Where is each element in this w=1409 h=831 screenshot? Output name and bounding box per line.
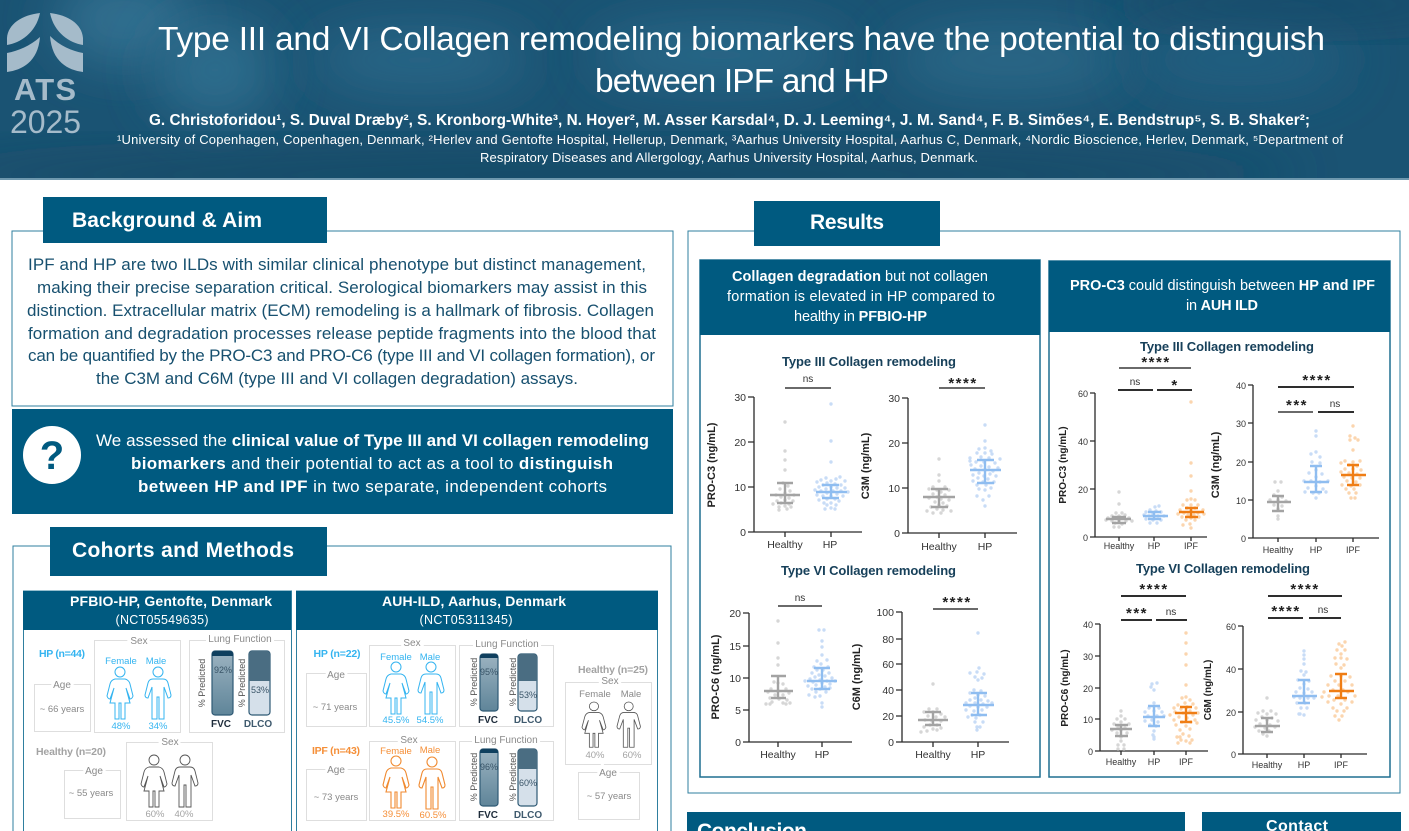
chart: C3M AUH: 10 xyxy=(1236,496,1246,506)
sex box: AUH HP: 45.5% xyxy=(383,715,410,726)
subheading: type VI: Type VI Collagen remodeling xyxy=(781,563,956,578)
chart: C6M PFBIO: C6M (ng/mL) xyxy=(851,643,863,710)
subheading: type III: Type III Collagen remodeling xyxy=(1140,339,1314,354)
heading: background and aim xyxy=(43,197,327,243)
chart: C3M AUH: IPF xyxy=(1346,545,1360,555)
chart: PRO-C3 PFBIO xyxy=(706,374,862,551)
subheading: type III: Type III Collagen remodeling xyxy=(782,354,956,369)
chart: PRO-C6 PFBIO: 10 xyxy=(729,673,741,685)
chart: C6M AUH: Healthy xyxy=(1252,760,1283,770)
sex box: HP: 34% xyxy=(148,721,168,732)
sex box: HP: Sex xyxy=(130,636,148,647)
chart: PRO-C3 PFBIO: HP xyxy=(823,539,837,551)
sex box: healthy: 60% xyxy=(145,809,165,820)
sex box: AUH healthy: Sex xyxy=(601,676,619,687)
sex box: healthy: Sex xyxy=(161,737,179,748)
chart: PRO-C3 PFBIO: 10 xyxy=(734,482,746,494)
sex box: AUH healthy: Female xyxy=(579,689,611,700)
chart: C3M PFBIO: C3M (ng/mL) xyxy=(860,432,872,499)
chart: PRO-C6 PFBIO: HP xyxy=(815,749,829,761)
chart: PRO-C6 AUH: ns xyxy=(1166,607,1176,618)
panel: PFBIO-HP results xyxy=(700,260,1040,777)
lung function box: HP xyxy=(190,634,284,732)
chart: PRO-C6 PFBIO: Healthy xyxy=(760,749,797,761)
lung function box: AUH IPF: 60% xyxy=(519,778,537,788)
affiliations: Respiratory Diseases and Allergology, Aarhus University Hospital, Aarhus, Denmark. xyxy=(480,150,978,165)
age box: AUH HP xyxy=(306,670,366,726)
chart: C3M AUH: **** xyxy=(1302,372,1332,389)
sex box: AUH IPF: Female xyxy=(380,746,412,757)
lung function box: HP: FVC xyxy=(211,719,231,730)
header banner xyxy=(0,0,1409,197)
lung function box: AUH HP xyxy=(460,639,554,726)
sex box: AUH IPF: 60.5% xyxy=(420,810,447,821)
heading: results: Results xyxy=(810,211,884,234)
label: Healthy n=25: Healthy (n=25) xyxy=(578,664,648,676)
chart: PRO-C6 AUH: 20 xyxy=(1083,684,1093,694)
chart: C6M PFBIO: Healthy xyxy=(915,749,952,761)
chart: PRO-C6 PFBIO: 15 xyxy=(729,641,741,653)
text: background paragraph: formation and degradation processes release peptide fragments into the blood that xyxy=(28,324,656,343)
age box: healthy: Age xyxy=(85,766,103,777)
panel: background and aim xyxy=(12,197,673,406)
panel header xyxy=(1049,261,1390,332)
chart: PRO-C6 AUH: IPF xyxy=(1179,757,1193,767)
age box: AUH IPF xyxy=(306,765,366,820)
lung function box: HP: % Predicted xyxy=(237,659,247,707)
chart: C3M AUH: Healthy xyxy=(1263,545,1294,555)
text: background paragraph xyxy=(27,255,656,388)
heading: background and aim: Background & Aim xyxy=(72,209,262,232)
chart: PRO-C3 PFBIO: Healthy xyxy=(767,539,804,551)
chart: PRO-C3 AUH: 40 xyxy=(1078,437,1088,447)
title xyxy=(158,21,1325,100)
label: HP n=22: HP (n=22) xyxy=(314,648,360,660)
chart: C6M AUH: C6M (ng/mL) xyxy=(1203,660,1214,720)
lung function box: AUH HP: 53% xyxy=(519,690,537,700)
sex box: AUH IPF: Male xyxy=(420,745,440,756)
chart: PRO-C6 PFBIO: PRO-C6 (ng/mL) xyxy=(710,634,722,719)
lung function box: AUH HP: % Predicted xyxy=(469,658,479,706)
sex box: AUH HP: Female xyxy=(380,652,412,663)
chart: PRO-C6 AUH: *** xyxy=(1126,605,1148,622)
panel header: Collagen degradation but not collagen xyxy=(732,269,988,285)
sex box: HP xyxy=(94,636,180,732)
panel header: PRO-C3 could distinguish between HP and IPF xyxy=(1070,278,1375,294)
text: aim: We assessed the clinical value of Type III and VI collagen remodeling xyxy=(96,431,649,450)
panel: PFBIO-HP cohort xyxy=(23,591,292,831)
chart: C3M PFBIO: 30 xyxy=(888,393,900,405)
chart: PRO-C3 AUH: IPF xyxy=(1184,541,1198,551)
chart: PRO-C3 AUH: 0 xyxy=(1083,533,1088,543)
lung function box: AUH HP: FVC xyxy=(478,715,498,726)
text: background paragraph: making their precise separation critical. Serological biomarkers may assist in this xyxy=(37,278,647,297)
sex box: HP: Male xyxy=(146,656,166,667)
panel header: healthy in PFBIO-HP xyxy=(794,309,927,325)
chart: PRO-C3 PFBIO: 0 xyxy=(740,527,746,539)
lung function box: AUH IPF: % Predicted xyxy=(508,753,518,801)
chart: C3M AUH: ns xyxy=(1330,399,1340,410)
lung function box: AUH HP: DLCO xyxy=(514,715,542,726)
chart: C6M AUH: IPF xyxy=(1334,760,1348,770)
chart: C3M PFBIO xyxy=(860,375,1017,553)
chart: PRO-C6 PFBIO: ns xyxy=(795,593,805,604)
lung function box: AUH HP: Lung Function xyxy=(475,639,539,650)
icon: question mark xyxy=(23,426,81,484)
chart: C6M PFBIO: 80 xyxy=(882,634,894,646)
chart: C6M PFBIO: 20 xyxy=(882,711,894,723)
text: background paragraph: IPF and HP are two ILDs with similar clinical phenotype but distinct management, xyxy=(28,255,646,274)
lung function box: AUH HP: % Predicted xyxy=(508,658,518,706)
sex box: AUH healthy: 40% xyxy=(585,750,605,761)
cohort header xyxy=(296,591,658,630)
panel: aim statement xyxy=(12,409,673,514)
lung function box: HP: 92% xyxy=(214,665,232,675)
lung function box: AUH HP: 95% xyxy=(480,667,498,677)
chart: PRO-C6 AUH: PRO-C6 (ng/mL) xyxy=(1060,649,1071,727)
chart: PRO-C3 AUH: **** xyxy=(1141,354,1171,371)
sex box: AUH healthy: Male xyxy=(621,689,641,700)
text: background paragraph: can be quantified by the PRO-C3 and PRO-C6 (type III and VI collagen formation), or xyxy=(28,346,655,365)
lung function box: AUH IPF: Lung Function xyxy=(474,735,538,746)
chart: C3M AUH: HP xyxy=(1310,545,1322,555)
age box: AUH healthy: ~ 57 years xyxy=(587,791,632,802)
chart: C3M AUH: 30 xyxy=(1236,419,1246,429)
subheading: type VI: Type VI Collagen remodeling xyxy=(1136,561,1310,576)
chart: PRO-C3 PFBIO: 30 xyxy=(734,392,746,404)
lung function box: HP: Lung Function xyxy=(208,634,272,645)
chart: C6M AUH: 40 xyxy=(1226,665,1236,675)
heading: cohorts and methods: Cohorts and Methods xyxy=(72,539,294,562)
chart: C3M PFBIO: **** xyxy=(948,375,978,392)
age box: HP: ~ 66 years xyxy=(40,704,85,715)
panel: conclusion xyxy=(687,812,1185,831)
chart: PRO-C6 PFBIO xyxy=(710,593,852,761)
chart: C3M PFBIO: 0 xyxy=(894,528,900,540)
title: between IPF and HP xyxy=(595,63,889,100)
chart: PRO-C3 AUH: PRO-C3 (ng/mL) xyxy=(1058,426,1069,504)
label: HP n=44: HP (n=44) xyxy=(39,648,85,660)
logo: ATS 2025 xyxy=(7,13,83,140)
chart: PRO-C3 AUH: * xyxy=(1171,377,1179,394)
panel header: formation is elevated in HP compared to xyxy=(727,289,995,305)
chart: C6M AUH: 0 xyxy=(1231,750,1236,760)
chart: PRO-C3 AUH: ns xyxy=(1130,377,1140,388)
chart: PRO-C3 PFBIO: 20 xyxy=(734,437,746,449)
panel: AUH-ILD cohort xyxy=(296,591,658,831)
age box: HP xyxy=(34,680,90,732)
chart: C3M AUH: 20 xyxy=(1236,458,1246,468)
chart: PRO-C6 AUH: 10 xyxy=(1083,715,1093,725)
panel: AUH ILD results xyxy=(1049,261,1390,777)
sex box: AUH HP: Sex xyxy=(403,638,421,649)
chart: C6M AUH: ns xyxy=(1318,605,1328,616)
label: IPF n=43: IPF (n=43) xyxy=(312,745,360,757)
chart: PRO-C6 AUH: 40 xyxy=(1083,620,1093,630)
affiliations: ¹University of Copenhagen, Copenhagen, Denmark, ²Herlev and Gentofte Hospital, Hellerup, Denmark, ³Aarhus University Hospital, Aarhus C, Denmark, ⁴Nordic Bioscience, Herlev, Denmark, ⁵Department of xyxy=(117,132,1343,147)
chart: C3M PFBIO: Healthy xyxy=(921,541,958,553)
chart: C3M PFBIO: 10 xyxy=(888,483,900,495)
age box: AUH HP: ~ 71 years xyxy=(313,702,358,713)
chart: PRO-C6 PFBIO: 20 xyxy=(729,608,741,620)
cohort header: (NCT05311345) xyxy=(420,613,512,627)
age box: AUH healthy xyxy=(578,768,640,820)
age box: AUH HP: Age xyxy=(327,670,345,681)
chart: PRO-C6 AUH xyxy=(1060,581,1208,767)
sex box: AUH healthy xyxy=(566,676,652,764)
chart: C3M PFBIO: HP xyxy=(978,541,992,553)
chart: C6M AUH xyxy=(1203,581,1367,770)
sex box: AUH IPF xyxy=(370,735,456,821)
panel: contact xyxy=(1202,812,1401,831)
panel header: in AUH ILD xyxy=(1186,298,1258,314)
chart: C3M PFBIO: 20 xyxy=(888,438,900,450)
sex box: healthy: 40% xyxy=(174,809,194,820)
sex box: AUH IPF: 39.5% xyxy=(383,809,410,820)
cohort header: (NCT05549635) xyxy=(116,613,208,627)
chart: PRO-C3 PFBIO: PRO-C3 (ng/mL) xyxy=(706,422,718,507)
title: Type III and VI Collagen remodeling biomarkers have the potential to distinguish xyxy=(158,21,1325,58)
age box: AUH IPF: Age xyxy=(327,765,345,776)
sex box: healthy xyxy=(126,737,212,820)
chart: C3M AUH: C3M (ng/mL) xyxy=(1210,431,1222,498)
chart: C6M AUH: 60 xyxy=(1226,622,1236,632)
authors: G. Christoforidou¹, S. Duval Dræby², S. Kronborg-White³, N. Hoyer², M. Asser Karsdal⁴, D. J. Leeming⁴, J. M. Sand⁴, F. B. Simões⁴, E. Bendstrup⁵, S. B. Shaker²; xyxy=(149,112,1310,129)
cohort header: PFBIO-HP, Gentofte, Denmark xyxy=(70,593,272,609)
cohort header xyxy=(23,591,291,630)
chart: C3M AUH: *** xyxy=(1286,397,1308,414)
chart: C6M AUH: 20 xyxy=(1226,708,1236,718)
age box: AUH healthy: Age xyxy=(599,768,617,779)
chart: C6M PFBIO: 0 xyxy=(888,737,894,749)
chart: PRO-C6 AUH: Healthy xyxy=(1106,757,1137,767)
sex box: HP: 48% xyxy=(111,721,131,732)
text: background paragraph: the C3M and C6M (type III and VI collagen degradation) assays. xyxy=(96,369,578,388)
logo: ATS 2025: 2025 xyxy=(10,104,81,140)
chart: PRO-C6 PFBIO: 0 xyxy=(735,737,741,749)
panel: results xyxy=(688,201,1400,793)
chart: C6M AUH: **** xyxy=(1290,581,1320,598)
sex box: AUH IPF: Sex xyxy=(400,735,418,746)
lung function box: AUH IPF: DLCO xyxy=(514,810,542,821)
chart: PRO-C6 AUH: **** xyxy=(1139,581,1169,598)
chart: C6M PFBIO: **** xyxy=(942,594,972,611)
chart: PRO-C6 PFBIO: 5 xyxy=(735,705,741,717)
age box: healthy: ~ 55 years xyxy=(69,788,114,799)
lung function box: HP: DLCO xyxy=(244,719,272,730)
text: background paragraph: distinction. Extracellular matrix (ECM) remodeling is a hallmark of fibrosis. Collagen xyxy=(27,301,654,320)
age box: healthy xyxy=(64,766,120,818)
chart: C6M PFBIO xyxy=(851,594,1009,761)
lung function box: AUH IPF: 96% xyxy=(480,762,498,772)
chart: C6M AUH: **** xyxy=(1271,603,1301,620)
chart: PRO-C3 AUH: 60 xyxy=(1078,389,1088,399)
lung function box: AUH IPF: % Predicted xyxy=(469,753,479,801)
lung function box: HP: % Predicted xyxy=(197,659,207,707)
lung function box: AUH IPF xyxy=(460,735,554,821)
age box: AUH IPF: ~ 73 years xyxy=(314,792,359,803)
chart: C6M PFBIO: 60 xyxy=(882,659,894,671)
chart: PRO-C3 PFBIO: ns xyxy=(803,374,813,385)
chart: C6M PFBIO: 100 xyxy=(876,607,894,619)
chart: PRO-C3 AUH xyxy=(1058,354,1207,551)
sex box: AUH HP xyxy=(370,638,456,726)
chart: C3M AUH xyxy=(1210,372,1379,555)
label: Healthy n=20: Healthy (n=20) xyxy=(36,746,106,758)
affiliations xyxy=(117,132,1343,165)
heading: results xyxy=(754,201,940,246)
lung function box: AUH IPF: FVC xyxy=(478,810,498,821)
sex box: AUH HP: 54.5% xyxy=(417,715,444,726)
chart: C3M AUH: 40 xyxy=(1236,381,1246,391)
text: aim: between HP and IPF in two separate, independent cohorts xyxy=(138,477,607,496)
sex box: AUH healthy: 60% xyxy=(622,750,642,761)
chart: PRO-C6 AUH: HP xyxy=(1148,757,1160,767)
panel header xyxy=(700,260,1040,335)
panel: cohorts and methods xyxy=(13,527,671,831)
lung function box: HP: 53% xyxy=(251,685,269,695)
chart: C6M AUH: HP xyxy=(1298,760,1310,770)
text: aim: biomarkers and their potential to act as a tool to distinguish xyxy=(131,454,613,473)
chart: PRO-C6 AUH: 30 xyxy=(1083,652,1093,662)
chart: PRO-C6 AUH: 0 xyxy=(1088,747,1093,757)
chart: C6M PFBIO: HP xyxy=(971,749,985,761)
chart: PRO-C3 AUH: Healthy xyxy=(1104,541,1135,551)
sex box: HP: Female xyxy=(105,656,137,667)
heading: cohorts and methods xyxy=(50,527,327,576)
text: aim xyxy=(96,431,649,496)
chart: C3M AUH: 0 xyxy=(1241,534,1246,544)
age box: HP: Age xyxy=(53,680,71,691)
sex box: AUH HP: Male xyxy=(420,652,440,663)
chart: PRO-C3 AUH: HP xyxy=(1148,541,1160,551)
logo: ATS 2025: ATS xyxy=(14,72,76,107)
cohort header: AUH-ILD, Aarhus, Denmark xyxy=(382,593,566,609)
chart: PRO-C3 AUH: 20 xyxy=(1078,485,1088,495)
icon: question mark: ? xyxy=(40,434,64,478)
chart: C6M PFBIO: 40 xyxy=(882,685,894,697)
